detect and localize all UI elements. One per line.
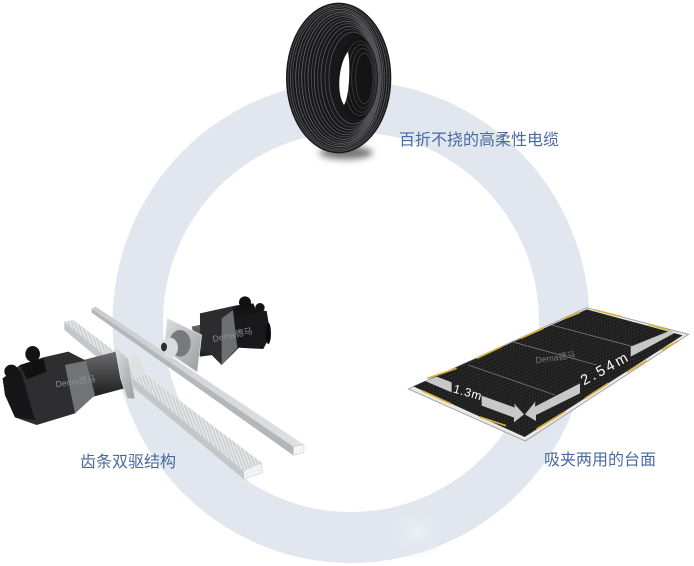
rear motor	[192, 296, 271, 365]
mesh surface	[413, 309, 683, 437]
rack and pinion dual drive	[3, 296, 304, 479]
icon: cable coil	[286, 3, 391, 159]
vacuum table	[408, 308, 689, 441]
watermark logos	[55, 325, 253, 389]
watermark logo: Dema德马	[535, 349, 576, 365]
label: flexible cable: 百折不挠的高柔性电缆	[399, 132, 559, 149]
dimension 2.54m: 2.54m	[578, 349, 633, 389]
front motor	[3, 346, 128, 425]
front flange and pinion	[115, 347, 144, 399]
rear flange and pinion	[161, 318, 202, 372]
label: vacuum table: 吸夹两用的台面	[544, 452, 656, 469]
dimension 1.3m: 1.3m	[452, 382, 484, 403]
front rack	[64, 320, 262, 479]
rear rack	[92, 307, 304, 455]
label: rack dual drive: 齿条双驱结构	[80, 454, 176, 471]
arrow: 1.3m	[425, 377, 524, 422]
watermark logos: Dema德马	[211, 325, 253, 344]
gold edge strips	[423, 310, 678, 429]
grid seams	[468, 325, 633, 395]
watermark logos: Dema德马	[55, 373, 96, 389]
ring	[112, 81, 590, 563]
arrow: 2.54m	[525, 330, 674, 421]
table frame	[408, 308, 689, 441]
